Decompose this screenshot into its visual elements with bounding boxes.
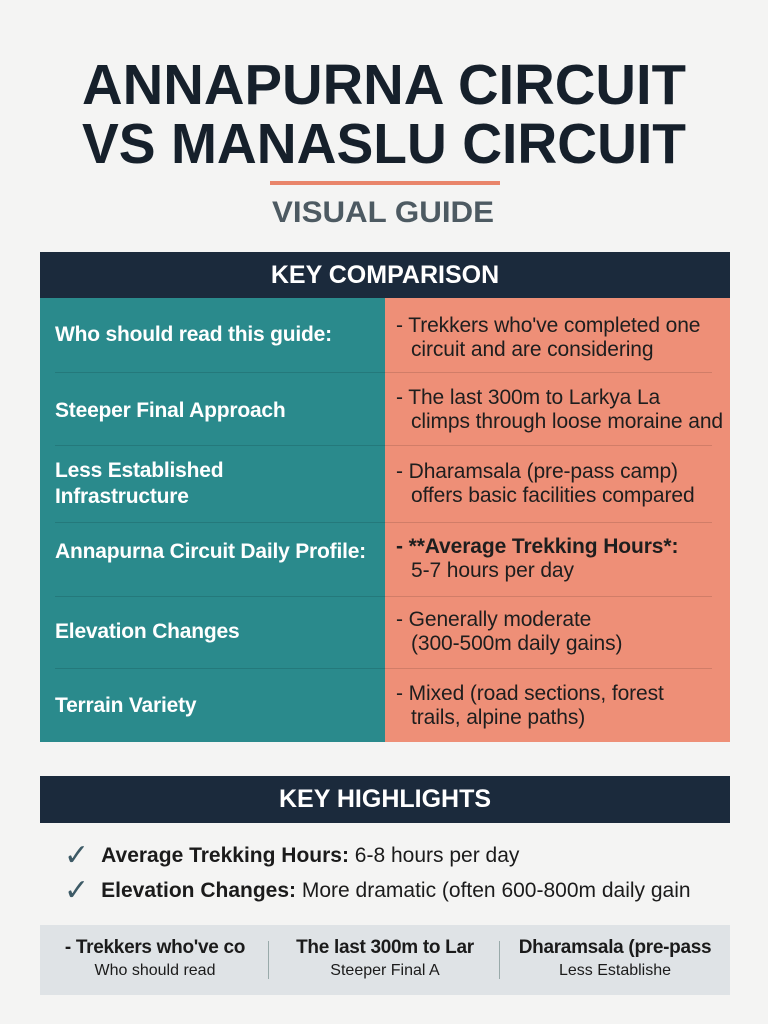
- summary 2: Steeper Final A: [330, 962, 440, 979]
- title: [82, 53, 686, 175]
- footer summary bar: [40, 925, 730, 995]
- row 2: Steeper Final Approach: [55, 399, 286, 422]
- text: circuit and are considering: [411, 338, 653, 361]
- row 3: Less Established: [55, 459, 223, 482]
- highlight 2: ✓ Elevation Changes: More dramatic (often 600-800m daily gain: [64, 874, 691, 907]
- text: - Dharamsala (pre-pass camp): [396, 460, 678, 483]
- panel: key comparison: [40, 252, 730, 742]
- orange divider: [270, 181, 500, 185]
- text: - Mixed (road sections, forest: [396, 682, 664, 705]
- text: trails, alpine paths): [411, 706, 585, 729]
- comparison header: [40, 252, 730, 298]
- summary 1: - Trekkers who've co: [65, 937, 245, 958]
- text: climps through loose moraine and: [411, 410, 723, 433]
- highlights header: KEY HIGHLIGHTS: [279, 785, 491, 813]
- subtitle: VISUAL GUIDE: [272, 196, 494, 229]
- comparison header: KEY COMPARISON: [271, 261, 499, 289]
- summary 3: [519, 937, 711, 979]
- highlight 1: ✓ Average Trekking Hours: 6-8 hours per day: [64, 839, 519, 872]
- text: offers basic facilities compared: [411, 484, 695, 507]
- summary 2: [296, 937, 474, 979]
- right column: [385, 298, 730, 742]
- text: - The last 300m to Larkya La: [396, 386, 660, 409]
- row 5: Elevation Changes: [55, 620, 239, 643]
- text: - **Average Trekking Hours*:: [396, 535, 678, 558]
- row 4: Annapurna Circuit Daily Profile:: [55, 540, 366, 563]
- left column: [40, 298, 385, 742]
- summary 3: Dharamsala (pre-pass: [519, 937, 711, 958]
- title: ANNAPURNA CIRCUIT: [82, 53, 686, 117]
- summary 1: Who should read: [95, 962, 215, 979]
- row 3: Infrastructure: [55, 485, 189, 508]
- row 3: [55, 459, 223, 508]
- row 6: Terrain Variety: [55, 694, 196, 717]
- summary 1: [65, 937, 245, 979]
- text: 5-7 hours per day: [411, 559, 574, 582]
- text: - Trekkers who've completed one: [396, 314, 700, 337]
- summary 2: The last 300m to Lar: [296, 937, 474, 958]
- highlights header: [40, 776, 730, 823]
- summary 3: Less Establishe: [559, 962, 671, 979]
- row 1: Who should read this guide:: [55, 323, 332, 346]
- text: (300-500m daily gains): [411, 632, 622, 655]
- title: VS MANASLU CIRCUIT: [82, 112, 686, 175]
- text: - Generally moderate: [396, 608, 591, 631]
